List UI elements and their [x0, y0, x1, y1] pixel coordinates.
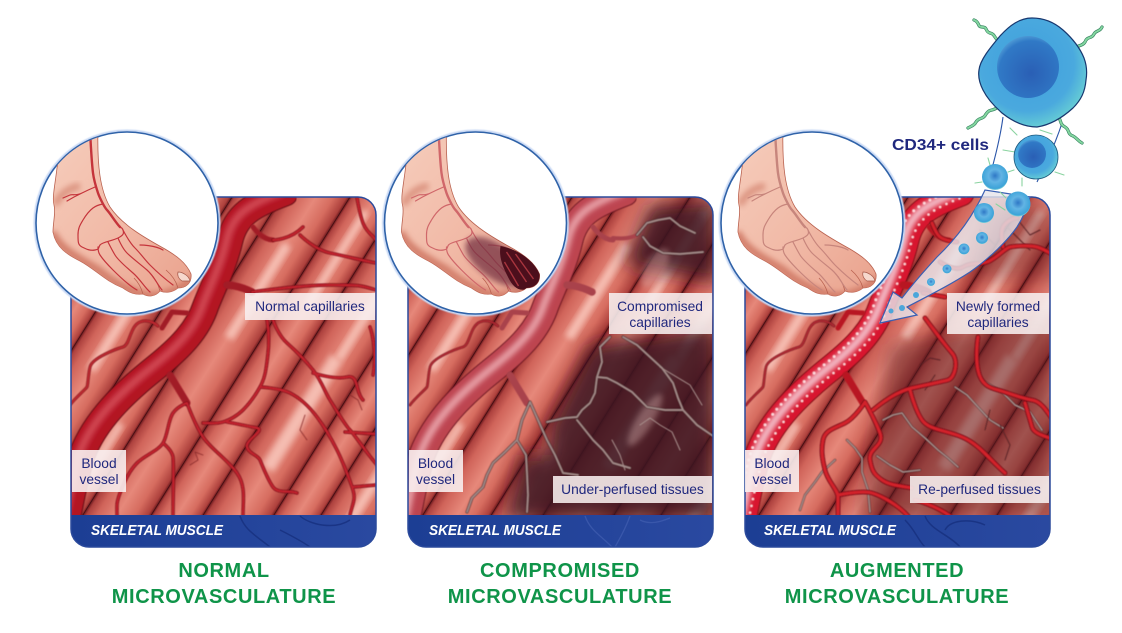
small cells: [888, 164, 1030, 314]
label: re-perfused tissues: [910, 476, 1049, 503]
skeletal muscle bar: [71, 515, 376, 547]
label: blood vessel: vessel: [416, 472, 455, 487]
label: normal capillaries: [245, 293, 375, 320]
label: skeletal muscle: SKELETAL MUSCLE: [91, 523, 224, 539]
label: skeletal muscle: SKELETAL MUSCLE: [429, 523, 562, 539]
panel border: [71, 197, 376, 547]
panel: augmented microvasculature: [718, 129, 1051, 548]
label: under-perfused tissues: [553, 476, 712, 503]
reperfused tissue shading: [860, 310, 1055, 520]
label: CD34+ cells: CD34+ cells: [892, 137, 989, 154]
beam outline lines: [987, 117, 1062, 187]
muscle tissue artwork: [72, 198, 376, 515]
muscle tissue artwork: [746, 198, 1050, 515]
heading: compromised: COMPROMISED: [480, 560, 640, 582]
arrow into vessel: [880, 190, 1030, 323]
green surface markers: [968, 20, 1102, 210]
label: blood vessel: [409, 450, 463, 492]
label: compromised capillaries: capillaries: [629, 315, 691, 330]
heading: augmented: AUGMENTED: [830, 560, 964, 582]
label: newly formed capillaries: capillaries: [967, 315, 1029, 330]
heading: augmented: MICROVASCULATURE: [785, 586, 1009, 608]
inset: gangrenous foot: [384, 128, 568, 315]
inset: recovered foot: [720, 128, 904, 315]
large CD34+ cell: [979, 18, 1087, 127]
label: skeletal muscle: SKELETAL MUSCLE: [764, 523, 897, 539]
label: blood vessel: Blood: [418, 456, 453, 471]
skeletal muscle bar: [408, 515, 713, 547]
main blood vessel: [404, 192, 625, 525]
label: blood vessel: [745, 450, 799, 492]
label: blood vessel: Blood: [754, 456, 790, 471]
label: compromised capillaries: [609, 293, 712, 334]
heading: normal: NORMAL: [178, 560, 270, 582]
label: newly formed capillaries: [947, 293, 1049, 334]
newly formed capillaries: [746, 218, 1055, 516]
medium cell: [1014, 135, 1058, 179]
label: under-perfused tissues: Under-perfused tissues: [561, 482, 704, 497]
heading: normal: MICROVASCULATURE: [112, 586, 336, 608]
main blood vessel with infused cells: [735, 190, 966, 528]
label: blood vessel: [72, 450, 126, 492]
panel border: [745, 197, 1050, 547]
panel: normal microvasculature: [33, 129, 377, 548]
label: re-perfused tissues: Re-perfused tissues: [918, 482, 1041, 497]
label: blood vessel: vessel: [79, 472, 119, 487]
main blood vessel: [63, 192, 285, 525]
under-perfused dark tissue: [505, 200, 716, 520]
inset: healthy foot: [35, 128, 219, 315]
heading: compromised: MICROVASCULATURE: [448, 586, 672, 608]
skeletal muscle bar: [745, 515, 1050, 547]
label: blood vessel: vessel: [752, 472, 792, 487]
panel: compromised microvasculature: [382, 129, 714, 548]
CD34+ cell delivery: [880, 18, 1102, 323]
old grey capillaries: [800, 210, 1042, 512]
label: normal capillaries: Normal capillaries: [255, 299, 365, 314]
panel border: [408, 197, 713, 547]
capillaries: normal: [70, 198, 378, 516]
label: newly formed capillaries: Newly formed: [956, 299, 1040, 314]
capillaries: compromised: [410, 218, 716, 512]
label: compromised capillaries: Compromised: [617, 299, 703, 314]
label: blood vessel: Blood: [81, 456, 117, 471]
muscle tissue artwork: [408, 198, 712, 515]
